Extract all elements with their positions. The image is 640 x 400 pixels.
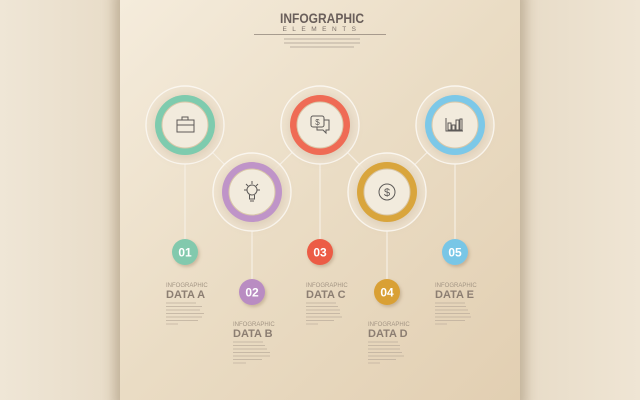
connectors [185, 125, 455, 280]
badges: 05 [448, 246, 462, 260]
node E: chart [416, 86, 494, 164]
badges: 01 [178, 246, 192, 260]
title [254, 10, 386, 47]
poster [120, 0, 520, 400]
node C: chat money [281, 86, 359, 164]
text blocks: DATA A [166, 289, 205, 301]
text blocks: INFOGRAPHIC [368, 322, 410, 328]
text blocks: DATA B [233, 328, 273, 340]
badges [172, 239, 468, 305]
badges: 02 [245, 286, 259, 300]
text blocks: DATA C [306, 289, 346, 301]
text blocks: INFOGRAPHIC [306, 283, 348, 289]
badges: 03 [313, 246, 327, 260]
node B: bulb [213, 153, 291, 231]
text blocks: INFOGRAPHIC [233, 322, 275, 328]
text blocks: INFOGRAPHIC [435, 283, 477, 289]
badges: 04 [380, 286, 394, 300]
node C: chat money: $ [315, 118, 320, 127]
title: ELEMENTS [282, 26, 362, 33]
node A: briefcase [146, 86, 224, 164]
text blocks [166, 283, 477, 363]
title: INFOGRAPHIC [280, 10, 364, 26]
text blocks: DATA D [368, 328, 408, 340]
text blocks: DATA E [435, 289, 474, 301]
node D: dollar: $ [384, 187, 390, 199]
node D: dollar [348, 153, 426, 231]
text blocks: INFOGRAPHIC [166, 283, 208, 289]
